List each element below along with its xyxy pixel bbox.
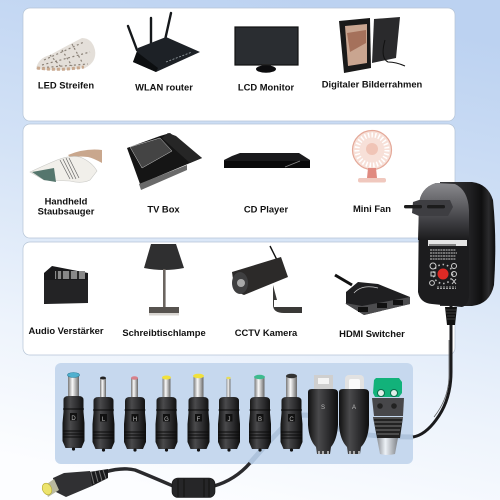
icon: CCTV camera bbox=[232, 246, 302, 313]
label: Handheld Staubsauger bbox=[38, 196, 95, 216]
icon: TV box bbox=[127, 133, 202, 190]
label: Digitaler Bilderrahmen: Digitaler Bilderrahmen bbox=[322, 78, 423, 90]
tip G: G bbox=[164, 417, 169, 423]
plug pins bbox=[404, 200, 453, 216]
icon: mini fan bbox=[352, 130, 392, 182]
label: Mini Fan: Mini Fan bbox=[353, 203, 391, 214]
tip J bbox=[218, 377, 240, 452]
adapter bbox=[404, 182, 495, 325]
panel: connector strip bbox=[55, 363, 413, 464]
connector: green screw terminal bbox=[372, 378, 404, 455]
panel: top devices bbox=[23, 8, 455, 121]
icon: LED strip bbox=[36, 38, 95, 70]
tip G bbox=[156, 376, 178, 452]
label: CCTV Kamera: CCTV Kamera bbox=[235, 327, 298, 338]
panel: middle devices bbox=[23, 124, 455, 238]
connector: USB-C bbox=[339, 375, 369, 455]
icon: HDMI switcher bbox=[335, 275, 410, 315]
label: Audio Verstärker: Audio Verstärker bbox=[28, 325, 104, 336]
tip J: J bbox=[228, 417, 230, 423]
certification marks bbox=[430, 263, 456, 288]
icon: CD player bbox=[224, 153, 310, 168]
label: LCD Monitor: LCD Monitor bbox=[238, 82, 294, 92]
icon: LCD monitor bbox=[235, 27, 298, 73]
strain relief bbox=[445, 307, 457, 325]
label: HDMI Switcher: HDMI Switcher bbox=[339, 328, 405, 339]
label: TV Box: TV Box bbox=[147, 204, 180, 214]
label: Schreibtischlampe: Schreibtischlampe bbox=[122, 327, 206, 338]
label: CD Player: CD Player bbox=[244, 204, 288, 214]
tip B bbox=[249, 375, 271, 452]
connector tips bbox=[62, 372, 302, 452]
icon: WLAN router bbox=[128, 13, 200, 72]
tip C: C bbox=[289, 417, 294, 423]
connector: micro USB: S bbox=[321, 405, 325, 411]
adapter body rear bbox=[440, 182, 495, 306]
DC plug bbox=[40, 469, 108, 497]
tip C bbox=[280, 374, 302, 452]
voltage dial bbox=[434, 264, 452, 284]
label: WLAN router: WLAN router bbox=[135, 82, 193, 92]
adapter front face bbox=[418, 183, 469, 307]
tip L: L bbox=[102, 417, 106, 423]
connector: micro USB bbox=[308, 375, 338, 455]
ferrite bead bbox=[172, 478, 215, 498]
icon: audio amplifier bbox=[44, 266, 88, 304]
tip F: F bbox=[197, 417, 201, 423]
connector: USB-C: A bbox=[352, 405, 356, 411]
tip D bbox=[62, 372, 84, 451]
label: LED Streifen: LED Streifen bbox=[38, 80, 94, 90]
label: Handheld Staubsauger: Staubsauger bbox=[38, 206, 95, 216]
tip L bbox=[92, 376, 114, 452]
icon: digital photo frame bbox=[339, 17, 405, 73]
icon: desk lamp bbox=[144, 244, 184, 316]
label: Handheld Staubsauger: Handheld bbox=[45, 196, 88, 206]
icon: handheld vacuum bbox=[30, 150, 102, 182]
tip B: B bbox=[258, 417, 262, 423]
power cable bbox=[40, 300, 451, 498]
tip F bbox=[188, 374, 210, 452]
adapter label plate bbox=[428, 240, 467, 259]
tip D: D bbox=[71, 416, 76, 422]
panel: bottom devices bbox=[23, 242, 455, 355]
cable shadow in strip bbox=[250, 415, 413, 463]
tip H: H bbox=[133, 417, 137, 423]
tip H bbox=[124, 376, 146, 452]
